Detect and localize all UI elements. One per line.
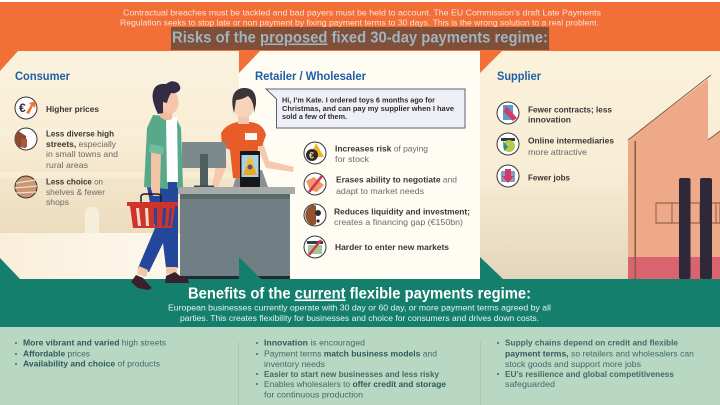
header band xyxy=(0,2,720,73)
list: retailer benefits: Payment terms match business models and xyxy=(264,350,437,358)
intro text: Regulation seeks to stop late or non payment by fixing payment terms to 30 days. This is the wrong solution to a real problem. xyxy=(120,18,599,28)
text: liquidity: Reduces liquidity and investment; xyxy=(334,206,470,216)
list: retailer benefits: Easier to start new businesses and less risky xyxy=(264,370,439,379)
illustration: tablet with rocket xyxy=(240,151,260,187)
speech bubble: Christmas, and can pay my supplier when I have xyxy=(282,106,454,113)
panel: retailer background xyxy=(239,51,480,279)
list: supplier benefits xyxy=(497,338,694,389)
icon: new markets xyxy=(304,236,326,258)
text: negotiate: adapt to market needs xyxy=(336,186,424,196)
text: less choice: shops xyxy=(46,197,69,207)
list: consumer benefits: More vibrant and varied high streets xyxy=(23,338,166,348)
text: intermediaries xyxy=(528,136,614,157)
supplier column xyxy=(497,71,614,187)
intro: benefits: parties. This creates flexibility for businesses and choice for consumers and drives down costs. xyxy=(180,314,539,323)
text: risk: Increases risk of paying xyxy=(335,144,428,154)
heading: risks: Risks of the proposed fixed 30-day payments regime: xyxy=(172,30,548,46)
text: risk: for stock xyxy=(335,154,370,164)
intro: benefits: European businesses currently operate with 30 day or 60 day, or more payment terms agreed by all xyxy=(168,304,551,312)
icon: risk xyxy=(304,142,326,164)
heading: supplier: Supplier xyxy=(497,71,541,83)
text: higher prices: Higher prices xyxy=(46,104,99,114)
list: supplier benefits: stock goods and support more jobs xyxy=(505,360,641,369)
icon: intermediaries xyxy=(497,133,519,155)
speech bubble: sold a few of them. xyxy=(282,114,347,121)
list: retailer benefits: Innovation is encouraged xyxy=(264,338,365,348)
heading: consumer: Consumer xyxy=(15,71,71,83)
band: benefits xyxy=(0,257,720,327)
icon: negotiate xyxy=(304,173,326,195)
list: consumer benefits: Availability and choice of products xyxy=(23,360,160,368)
list: retailer benefits: for continuous production xyxy=(264,390,363,400)
illustration: factory xyxy=(628,75,720,279)
list: retailer benefits xyxy=(256,338,446,400)
text: less choice: shelves & fewer xyxy=(46,187,105,197)
text: high streets xyxy=(46,128,118,170)
list: supplier benefits: EU’s resilience and global competitiveness xyxy=(505,370,674,379)
text: jobs: Fewer jobs xyxy=(528,172,570,182)
list: supplier benefits: Supply chains depend on credit and flexible xyxy=(505,338,678,348)
text: contracts: Fewer contracts; less xyxy=(528,104,612,114)
text: negotiate: Erases ability to negotiate and xyxy=(336,174,457,184)
text: high streets: rural areas xyxy=(46,160,88,170)
illustration: customer with basket xyxy=(127,81,189,290)
text: high streets: Less diverse high xyxy=(46,128,114,138)
list: supplier benefits: payment terms, so retailers and wholesalers can xyxy=(505,350,694,358)
text: intermediaries: more attractive xyxy=(528,147,587,157)
list: consumer benefits xyxy=(15,338,166,368)
heading: benefits: Benefits of the current flexible payments regime: xyxy=(188,286,531,302)
illustration: monitor xyxy=(182,142,226,187)
list: supplier benefits: safeguarded xyxy=(505,380,555,389)
illustration: shopkeeper Kate xyxy=(212,88,294,187)
text: new markets: Harder to enter new markets xyxy=(335,242,449,252)
text: high streets: in small towns and xyxy=(46,149,118,159)
text: high streets: streets, especially xyxy=(46,139,117,149)
panel: consumer background xyxy=(0,51,239,279)
intro text: Contractual breaches must be tackled and bad payers must be held to account. The EU Commission’s draft Late Payments xyxy=(123,8,601,18)
text: liquidity xyxy=(334,206,470,227)
list: consumer benefits: Affordable prices xyxy=(23,350,90,358)
intro text xyxy=(120,8,601,28)
list: retailer benefits: Enables wholesalers to offer credit and storage xyxy=(264,380,446,389)
text: contracts: innovation xyxy=(528,114,571,124)
speech bubble xyxy=(266,89,465,128)
icon: shelves xyxy=(15,176,37,198)
icon: high street xyxy=(15,128,37,150)
panel: benefits lists xyxy=(0,327,720,405)
text: risk xyxy=(335,144,428,164)
icon: higher prices: € xyxy=(19,101,26,115)
illustration: shop counter xyxy=(178,187,295,279)
text: contracts xyxy=(528,104,612,124)
text: liquidity: creates a financing gap (€150bn) xyxy=(334,217,463,227)
icon: liquidity xyxy=(304,204,326,226)
icon: jobs xyxy=(497,165,519,187)
icon: contracts xyxy=(497,102,519,124)
retailer column xyxy=(255,71,470,258)
text: less choice xyxy=(46,176,105,207)
text: less choice: Less choice on xyxy=(46,176,103,186)
text: negotiate xyxy=(336,174,457,196)
heading: retailer / wholesaler: Retailer / Wholesaler xyxy=(255,71,367,83)
text: intermediaries: Online intermediaries xyxy=(528,136,614,146)
speech bubble: Hi, I’m Kate. I ordered toys 6 months ago for xyxy=(282,98,435,104)
intro: benefits xyxy=(168,304,551,323)
panel: supplier background xyxy=(480,51,720,279)
list: retailer benefits: inventory needs xyxy=(264,360,325,369)
icon: risk: € xyxy=(309,150,314,160)
consumer column xyxy=(15,71,118,207)
